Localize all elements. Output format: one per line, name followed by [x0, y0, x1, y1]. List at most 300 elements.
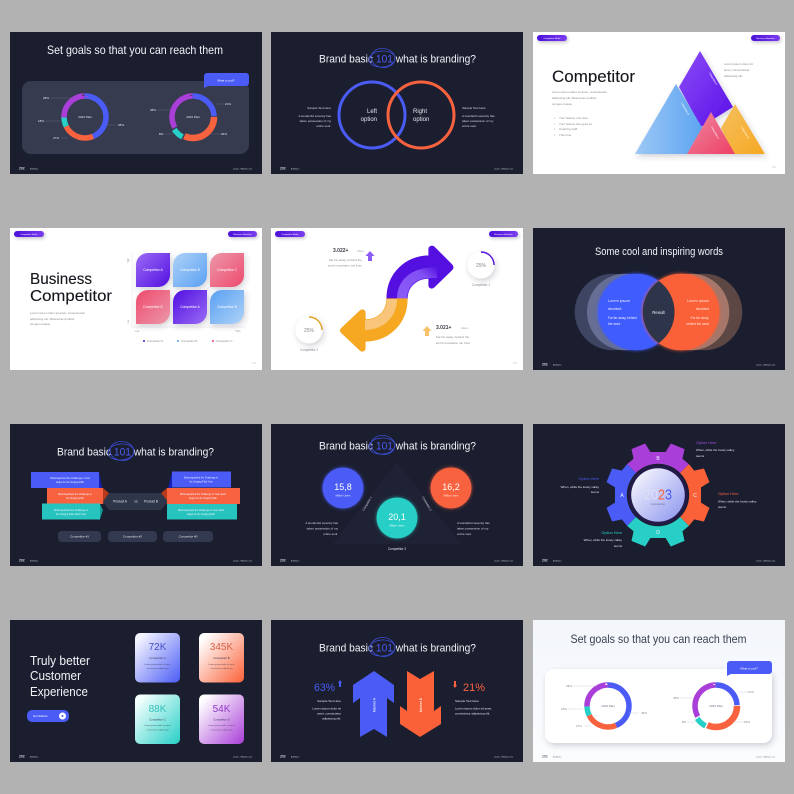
label option A: teems	[591, 490, 599, 494]
right text block: Lorem ipsum dolor sit amet,	[455, 706, 492, 710]
matrix axes: Low	[135, 330, 139, 333]
bullet list: •	[554, 116, 555, 120]
footer: Lorem - Website.com	[756, 364, 775, 366]
footer: 202	[19, 754, 25, 758]
chart card	[22, 81, 249, 154]
stat upper	[328, 248, 364, 268]
donut chart right: 33%	[221, 132, 227, 136]
footer: Ashflame	[30, 756, 39, 758]
left bars: Distinctguished the Challenge in	[54, 509, 89, 512]
footer: 202	[280, 754, 286, 758]
card 54K: Competitor D	[213, 718, 230, 722]
footer: Ashflame	[291, 756, 300, 758]
footer: Ashflame	[291, 560, 300, 562]
bullet list: This time	[559, 133, 572, 137]
footer: Lorem - Website.com	[233, 560, 252, 562]
tag left	[14, 231, 44, 237]
result lens	[643, 281, 675, 343]
scribble around 101	[368, 434, 396, 456]
tag left: Competitor Slides	[281, 233, 300, 236]
card 345K: Lorem ipsum dolor sit amet	[208, 663, 235, 666]
faint backdrop triangle	[333, 462, 461, 544]
circle orange: Million Users	[444, 494, 459, 498]
card 72K: 72K	[149, 642, 167, 653]
card 88K	[135, 694, 180, 744]
slide background	[271, 228, 523, 370]
tag right: Business Narrative	[233, 233, 252, 236]
footer: Ashflame	[553, 560, 562, 562]
slide background	[10, 32, 262, 174]
slide background	[533, 424, 785, 566]
centre year: 2023	[644, 488, 672, 504]
right bars: target for the Surging Path	[189, 497, 218, 500]
page number: 103	[513, 361, 518, 365]
card 345K: Competitor B	[213, 656, 230, 660]
right text block: A wonderful serenity has	[457, 521, 490, 525]
purple arrow	[387, 246, 453, 299]
left bars: Distinctguished the Challenge in Year	[50, 477, 90, 480]
pyramid chart	[635, 51, 765, 154]
left text block: A wonderful serenity has	[305, 521, 338, 525]
matrix tiles: Competitor D	[143, 305, 164, 309]
paragraph: Lorem ipsum dolor sit amet, consectetuer	[30, 311, 85, 315]
matrix axes: High	[236, 330, 241, 333]
heading: Competitor	[30, 288, 113, 305]
right option label: option	[413, 117, 429, 123]
gear letters	[620, 456, 697, 536]
donut chart right: 8%	[682, 720, 686, 724]
footer	[280, 754, 513, 758]
panel: slide 7 product comparison	[10, 424, 262, 566]
left bars: Distinctguished the Challenge in	[58, 493, 93, 496]
tag left	[275, 231, 305, 237]
competitor pills: Competitor #2	[123, 534, 142, 538]
tag right	[228, 231, 257, 237]
footer: Lorem - Website.com	[756, 560, 775, 562]
stat 63%: 63%	[314, 682, 335, 694]
right text block: A wonderful serenity has	[462, 114, 495, 118]
button	[27, 710, 69, 722]
left text block: Lorem ipsum dolor sit	[312, 706, 341, 710]
card 72K: consectetur adipiscing	[147, 667, 169, 670]
panel: slide 4 business competitor matrix	[10, 228, 262, 370]
slide background	[533, 620, 785, 762]
label option B: Option Here	[696, 441, 716, 445]
matrix axes: High	[127, 257, 130, 263]
label option C: teems	[718, 505, 727, 509]
matrix tiles: Competitor B	[180, 268, 201, 272]
card 345K: 345K	[210, 642, 234, 653]
gear letters: C	[693, 493, 697, 499]
donut chart right	[150, 94, 231, 140]
right text block: entire soul.	[462, 124, 477, 128]
stat lower: word mountains, far from	[436, 341, 471, 345]
pyramid chart: Competitor C	[710, 126, 720, 140]
paragraph: Lorem ipsum dolor sit amet, consectetuer	[552, 90, 607, 94]
right text: Lorem ipsum	[687, 299, 709, 303]
card 88K: Competitor C	[149, 718, 166, 722]
right text block: taken possession of my	[457, 526, 489, 530]
circle orange	[430, 467, 472, 509]
competitor pills: Competitor #3	[179, 534, 198, 538]
title: Set goals so that you can reach them	[47, 43, 223, 57]
left text: Lorem ipsum	[608, 299, 630, 303]
pyramid chart: Competitor A	[708, 72, 718, 86]
rotated label competitor 1: Competitor 1	[361, 495, 373, 511]
card 345K: consectetur adipiscing	[211, 667, 233, 670]
panel: slide 6 inspiring venn	[533, 228, 785, 370]
right bars: target for the Surging Path	[187, 513, 216, 516]
circle teal: 20,1	[388, 512, 406, 522]
stat 21%: 21%	[463, 682, 485, 694]
footer: Lorem - Website.com	[494, 560, 513, 562]
heading: Competitor	[552, 68, 636, 86]
title: Brand basic 101 what is branding?	[319, 54, 476, 66]
footer: Lorem - Website.com	[494, 168, 513, 170]
card 54K: Lorem ipsum dolor sit amet	[208, 724, 235, 727]
matrix tiles: Competitor B	[217, 305, 238, 309]
matrix tiles	[136, 253, 244, 324]
slide background	[271, 620, 523, 762]
bullet list: Your feature two goes on	[559, 122, 593, 126]
donut chart right: 38%	[150, 108, 156, 112]
centre caption: Competitor	[651, 502, 665, 506]
footer	[280, 166, 513, 170]
footer: Lorem - Website.com	[756, 756, 775, 758]
orange arrow	[340, 299, 407, 351]
matrix axes	[127, 253, 246, 333]
circle orange: 16,2	[442, 482, 460, 492]
right text block: entire soul.	[457, 532, 472, 536]
donut chart left: 28%	[566, 684, 572, 688]
panel: slide 9 gear diagram	[533, 424, 785, 566]
footer	[542, 754, 775, 758]
title: Set goals so that you can reach them	[570, 632, 746, 646]
right bars: Distinctguished the Challenge in	[184, 476, 219, 480]
paragraph: congue massa.	[30, 322, 51, 326]
donut chart left: 38%	[641, 711, 647, 715]
connector folds	[99, 472, 172, 519]
donut chart left: 2023 Plan	[78, 115, 92, 119]
title: Brand basic 101 what is branding?	[57, 446, 214, 458]
footer: Lorem - Website.com	[233, 168, 252, 170]
paragraph: congue massa.	[552, 102, 573, 106]
left bars	[31, 472, 103, 520]
gear segment B	[627, 444, 689, 473]
panel: slide 3 competitor pyramid	[533, 32, 785, 174]
footer: Lorem - Website.com	[494, 756, 513, 758]
slide background	[533, 32, 785, 174]
orange down arrow	[400, 671, 441, 737]
footer: Ashflame	[291, 168, 300, 170]
donut chart right: 38%	[673, 696, 679, 700]
heading: Truly better	[30, 653, 91, 668]
rotated label competitor 3: Competitor 3	[421, 496, 433, 512]
page number: 102	[252, 361, 257, 365]
gear letters: B	[656, 456, 660, 462]
left bars: the Surging Path	[66, 497, 85, 500]
card 72K: Lorem ipsum dolor sit amet	[144, 663, 171, 666]
label option D: Option Here	[602, 531, 622, 535]
speech bubble: What a cool?	[740, 666, 758, 670]
slide background	[271, 32, 523, 174]
gear	[607, 444, 709, 546]
footer	[280, 558, 513, 562]
label option A: Option Here	[579, 477, 599, 481]
scribble around 101	[368, 636, 396, 658]
footer	[542, 362, 775, 366]
scribble around 101	[368, 47, 396, 69]
donut chart left	[38, 96, 124, 140]
panel: slide 5 s-curve arrows	[271, 228, 523, 370]
footer	[542, 558, 775, 562]
donut chart left: 2023 Plan	[601, 704, 615, 708]
donut chart left: 27%	[576, 724, 582, 728]
donut chart right	[673, 684, 754, 728]
right venn stack	[642, 273, 742, 351]
panel: slide 2 venn outline	[271, 32, 523, 174]
left text block: A wonderful serenity has	[298, 114, 331, 118]
left text: the word	[608, 322, 620, 326]
donut chart right: 8%	[159, 132, 163, 136]
matrix tiles: Competitor A	[180, 305, 201, 309]
speech bubble: What a cool?	[217, 78, 235, 82]
gear segment A	[607, 464, 636, 526]
card 88K: Lorem ipsum dolor sit amet	[144, 724, 171, 727]
tag left	[537, 35, 567, 41]
footer: Ashflame	[553, 364, 562, 366]
right circle	[388, 82, 454, 148]
heading: Customer	[30, 668, 82, 683]
right bars: the Surging Path Year	[189, 480, 213, 484]
right option label: Right	[413, 109, 427, 115]
right text	[686, 299, 709, 326]
left option label: option	[361, 117, 377, 123]
blue up arrow	[353, 671, 394, 737]
label option B: When, while the lovely valley	[696, 448, 735, 452]
label option A: When, while the lovely valley	[561, 485, 599, 489]
gear letters: D	[656, 530, 660, 536]
left text: Far far away, behind	[608, 316, 637, 320]
circle blue: Million Users	[336, 494, 351, 498]
footer: 202	[280, 558, 286, 562]
speech bubble	[204, 73, 249, 88]
right text block: Sample Text Here	[455, 699, 479, 703]
footer: 202	[542, 558, 548, 562]
gauge competitor 1	[468, 252, 494, 287]
footer	[19, 166, 252, 170]
pyramid chart: Competitor B	[680, 102, 690, 116]
note text: Lorem ipsum dolor sit	[724, 62, 753, 66]
gear segment D	[627, 517, 689, 546]
icon: orange up arrow	[422, 326, 432, 336]
card 54K	[199, 694, 244, 744]
stat upper: Far far away, behind the	[329, 258, 362, 262]
label option C: Option Here	[718, 492, 738, 496]
footer: Lorem - Website.com	[233, 756, 252, 758]
heading: Business	[30, 271, 92, 288]
footer	[19, 558, 252, 562]
dark ring	[628, 465, 688, 525]
slide background	[10, 620, 262, 762]
left text block: amet, consectetur	[317, 712, 341, 716]
chart card	[545, 669, 772, 743]
right text: decided	[696, 307, 709, 311]
panel: slide 10 customer experience cards	[10, 620, 262, 762]
card 54K: 54K	[213, 704, 231, 715]
footer	[19, 754, 252, 758]
slide background	[533, 228, 785, 370]
stat lower: 3.021+	[436, 325, 452, 331]
stat upper: Users	[357, 249, 364, 253]
scribble around 101	[107, 440, 135, 462]
heading: Experience	[30, 684, 88, 699]
icon: blue up marker	[338, 680, 342, 687]
orange down arrow: Market B	[419, 697, 423, 712]
centre disc	[631, 468, 685, 522]
left text block: adipiscing elit.	[322, 716, 341, 720]
legend: Competitor B	[181, 339, 197, 343]
label option C: When, while the lovely valley	[718, 500, 757, 504]
footer: Ashflame	[30, 168, 39, 170]
gear letters: A	[620, 493, 624, 499]
legend: Competitor C	[216, 339, 232, 343]
card 54K: consectetur adipiscing	[211, 728, 233, 732]
slide background	[271, 424, 523, 566]
donut chart right: 2023 Plan	[186, 115, 200, 119]
button: Get Started	[33, 714, 48, 718]
note text: amet, consectetuer	[724, 68, 750, 72]
gauge competitor 2	[296, 316, 322, 352]
slide background	[10, 424, 262, 566]
donut chart left: 28%	[43, 96, 49, 100]
note text: adipiscing elit.	[724, 74, 743, 78]
tag right: Business Narrative	[756, 37, 775, 40]
matrix tiles: Competitor C	[217, 268, 238, 272]
label option A	[561, 477, 599, 494]
legend	[143, 339, 232, 343]
donut chart left: 18%	[561, 707, 567, 711]
legend: Competitor A	[147, 339, 163, 343]
tag right	[489, 231, 518, 237]
donut chart right: 33%	[744, 720, 750, 724]
paragraph: adipiscing elit. Maecenas porttitor	[552, 96, 597, 100]
stat lower: Far far away, behind the	[436, 335, 469, 339]
gauge competitor 1: Competitor 1	[472, 283, 490, 287]
right bars: Distinctguished the Challenge in Year, Each	[178, 509, 225, 512]
label option C	[718, 492, 757, 509]
panel: slide 12 light donut charts	[533, 620, 785, 762]
card 345K	[199, 633, 244, 682]
product vs hexagon: Product A	[113, 500, 128, 504]
speech bubble	[727, 661, 772, 676]
left option label: Left	[367, 109, 377, 115]
stat upper: word mountains, far from	[328, 264, 362, 268]
stat lower	[436, 325, 471, 345]
bullet list: •	[554, 133, 555, 137]
circle teal: Million Users	[390, 524, 405, 528]
right bars	[167, 472, 240, 520]
right text block: taken possession of my	[462, 119, 494, 123]
competitor pills: Competitor #1	[70, 534, 89, 538]
circle blue: 15,8	[334, 482, 352, 492]
footer: Ashflame	[30, 560, 39, 562]
donut chart right: 21%	[225, 102, 231, 106]
footer: 202	[542, 754, 548, 758]
label option B: teems	[696, 454, 705, 458]
left text block: taken possession of my	[307, 526, 338, 530]
circle teal	[376, 497, 418, 539]
bullet list: •	[554, 127, 555, 131]
competitor pills	[58, 531, 213, 542]
card 72K: Competitor A	[149, 656, 166, 660]
right text: Far far away,	[691, 316, 709, 320]
tag right	[751, 35, 780, 41]
left text block: Sample Text Here	[307, 106, 331, 110]
result label: Result	[652, 310, 665, 315]
donut chart right: 21%	[748, 690, 754, 694]
product vs hexagon: vs	[134, 500, 138, 504]
label option D: teems	[614, 544, 622, 548]
gauge competitor 2: Competitor 2	[300, 348, 318, 352]
tag left: Competitor Slides	[543, 37, 562, 40]
title: Some cool and inspiring words	[595, 246, 723, 258]
donut chart left: 18%	[38, 119, 44, 123]
card 72K	[135, 633, 180, 682]
matrix tiles: Competitor A	[143, 268, 164, 272]
left bars: target for the Surging Path	[56, 481, 85, 484]
panel: slide 11 market arrows	[271, 620, 523, 762]
left text: decided	[608, 307, 621, 311]
product vs hexagon	[103, 493, 168, 510]
stat lower: Users	[461, 326, 468, 330]
icon: orange down marker	[453, 681, 457, 688]
left text block: Sample Text Here	[317, 699, 341, 703]
left bars: the Surging Path, Each Year	[56, 513, 86, 516]
product vs hexagon: Product B	[144, 500, 158, 504]
tag right: Business Narrative	[494, 233, 513, 236]
left text block: entire soul.	[316, 124, 331, 128]
competitor 2 label: Competitor 2	[388, 547, 406, 551]
right bars: Distinctguished the Challenge in Year, Each	[180, 493, 227, 496]
left venn stack	[575, 273, 675, 351]
right text: behind the word	[686, 322, 709, 326]
left text	[608, 299, 637, 326]
bullet list: Your feature one here	[559, 116, 588, 120]
label option D: When, while the lovely valley	[584, 538, 622, 542]
title: Brand basic 101 what is branding?	[319, 440, 476, 452]
right text block: consectetur adipiscing elit.	[455, 712, 490, 716]
footer: Ashflame	[553, 756, 562, 758]
right text block: Sample Text Here	[462, 106, 486, 110]
icon: purple up arrow	[366, 251, 374, 261]
bullet list: Amazing stuff	[559, 127, 577, 131]
tag left: Competitor Slides	[20, 233, 39, 236]
donut chart left: 27%	[53, 136, 59, 140]
panel: slide 1 dark donut charts	[10, 32, 262, 174]
footer: 202	[280, 166, 286, 170]
donut chart left: 38%	[118, 123, 124, 127]
pyramid chart: Competitor D	[740, 126, 750, 140]
footer: 202	[19, 166, 25, 170]
footer: 202	[19, 558, 25, 562]
panel: slide 8 three circles	[271, 424, 523, 566]
page number: 101	[772, 165, 777, 169]
paragraph: adipiscing elit. Maecenas porttitor	[30, 317, 75, 321]
circle blue	[322, 467, 364, 509]
matrix axes: Low	[127, 319, 130, 324]
gauge competitor 2: 25%	[304, 328, 315, 334]
